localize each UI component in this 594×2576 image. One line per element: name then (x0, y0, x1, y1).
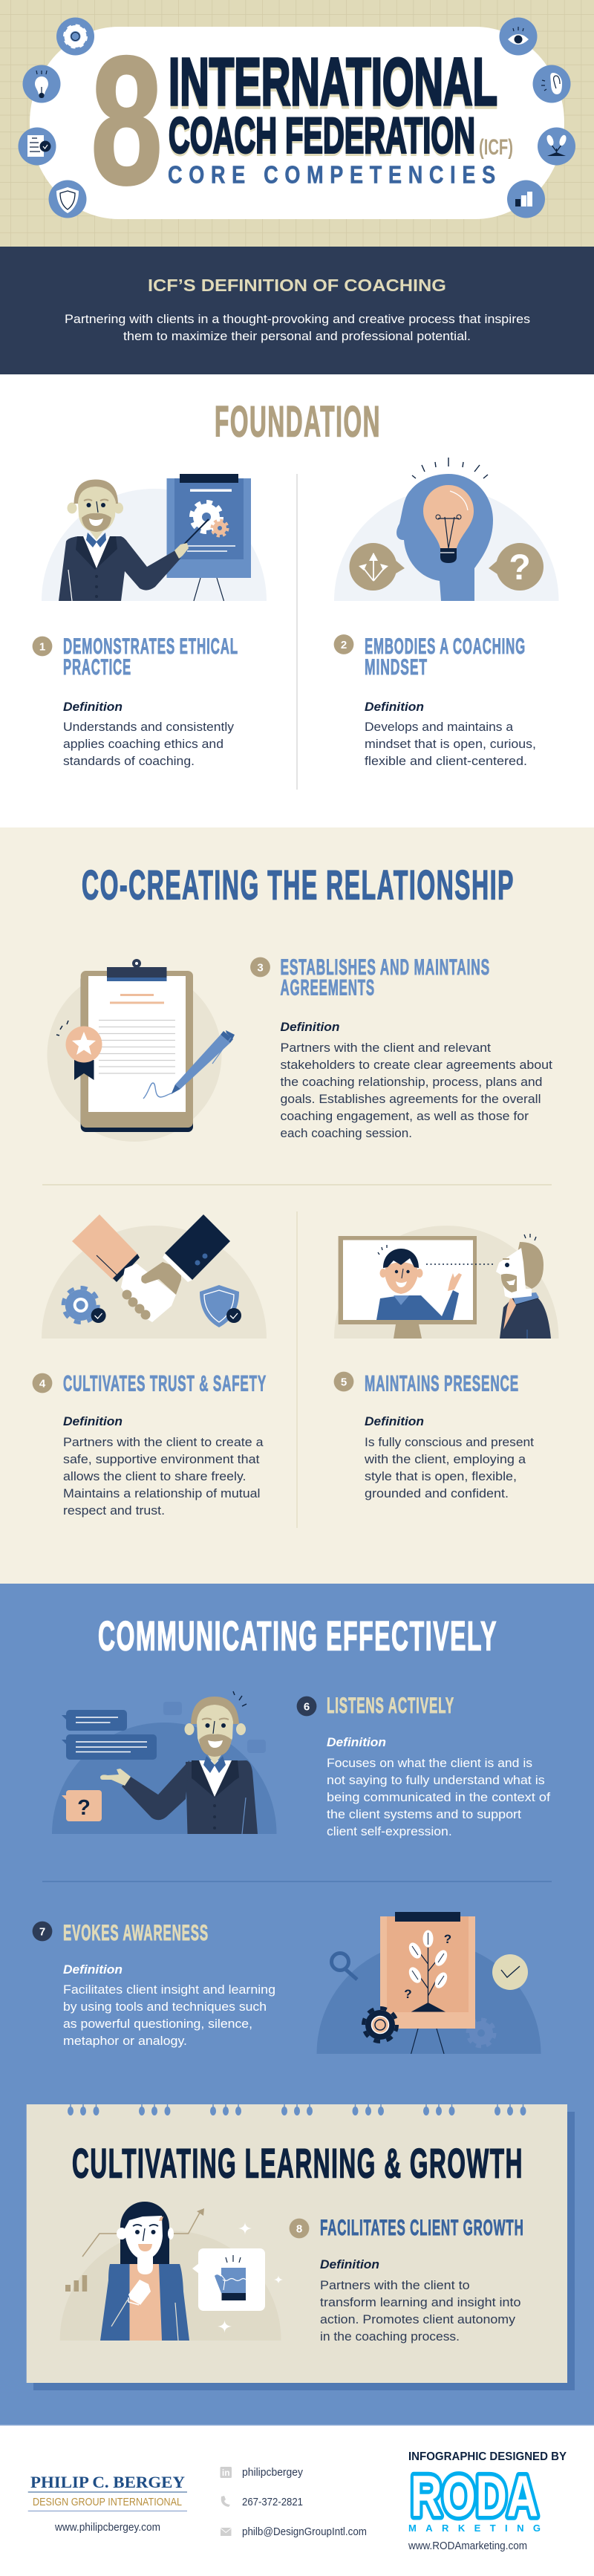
definition text 1: applies coaching ethics and (63, 737, 223, 751)
definition text 6: the client systems and to support (327, 1807, 521, 1821)
header white badge shape (30, 27, 564, 219)
definition label 5: Definition (365, 1415, 424, 1428)
heading 4: CULTIVATES TRUST & SAFETY (63, 1371, 267, 1396)
illustration: presenter at flip chart (42, 474, 267, 601)
badge 5: 5 (341, 1376, 347, 1389)
illustration: listening man with speech bubbles: ? (77, 1796, 91, 1820)
logo: RODA marketing: RODA (411, 2463, 538, 2528)
contact details (220, 2466, 367, 2538)
illustration: head with light bulb (334, 458, 558, 601)
illustration: listening man with speech bubbles (52, 1691, 276, 1834)
definition text 3: Partners with the client and relevant (281, 1041, 491, 1055)
icon: ear (533, 65, 570, 103)
illustration: woman with fist bump (60, 2202, 283, 2341)
definition text 7: as powerful questioning, silence, (63, 2017, 252, 2031)
competency 8 (290, 2216, 524, 2344)
definition text 4: respect and trust. (63, 1503, 165, 1518)
title suffix: ICF: (ICF) (479, 135, 513, 160)
icon: shield (49, 180, 86, 218)
logo: Philip C. Bergey: DESIGN GROUP INTERNATIONAL (33, 2496, 182, 2508)
definition text 3: each coaching session. (281, 1126, 412, 1140)
panel: ICF definition of coaching (0, 247, 594, 374)
badge 1 (33, 637, 52, 656)
badge 1: 1 (39, 640, 45, 654)
definition text 4: safe, supportive environment that (63, 1452, 260, 1466)
badge 4 (33, 1373, 52, 1393)
icon: bar chart (507, 180, 545, 218)
icon: document with check (18, 128, 56, 165)
footer (0, 2424, 594, 2576)
heading 1: PRACTICE (63, 655, 131, 680)
definition text 1: standards of coaching. (63, 754, 195, 768)
definition text 2: Develops and maintains a (365, 720, 514, 734)
panel: co-creating the relationship (0, 827, 594, 1584)
designer credit: INFOGRAPHIC DESIGNED BY (408, 2450, 567, 2463)
competency 5 (334, 1371, 534, 1500)
definition text 4: allows the client to share freely. (63, 1469, 247, 1483)
definition text 3: the coaching relationship, process, plans and (281, 1075, 542, 1089)
panel: communicating effectively (0, 1584, 594, 2425)
definition text 7: Facilitates client insight and learning (63, 1983, 275, 1997)
definition text 6: client self-expression. (327, 1824, 452, 1838)
icon: light bulb (22, 65, 61, 103)
definition heading: ICF’S DEFINITION OF COACHING (148, 276, 446, 295)
definition text 5: style that is open, flexible, (365, 1469, 517, 1483)
competency 4 (33, 1371, 267, 1518)
competency 6 (297, 1694, 550, 1838)
email: philb@DesignGroupIntl.com (242, 2525, 367, 2538)
icon: mail (221, 2528, 232, 2536)
badge 5 (334, 1372, 353, 1391)
icon: phone (221, 2496, 230, 2507)
header panel (0, 0, 594, 247)
definition text 3: coaching engagement, as well as those for (281, 1109, 529, 1123)
icon: eye (499, 18, 538, 55)
logo: Philip C. Bergey (28, 2473, 187, 2534)
illustration: plant on flip chart: ? (404, 1987, 412, 2001)
definition text 4: Maintains a relationship of mutual (63, 1486, 260, 1500)
definition label 4: Definition (63, 1415, 123, 1428)
icon: growing plant (538, 128, 575, 165)
heading: foundation: FOUNDATION (215, 398, 381, 446)
competency 7 (33, 1921, 275, 2048)
definition label 3: Definition (281, 1021, 340, 1034)
definition text 1: Understands and consistently (63, 720, 235, 734)
definition text 7: metaphor or analogy. (63, 2034, 187, 2048)
definition text 8: Partners with the client to (320, 2278, 470, 2292)
logo: RODA marketing: MARKETING (408, 2523, 541, 2534)
title (91, 19, 513, 223)
definition text 4: Partners with the client to create a (63, 1435, 264, 1449)
illustration: clipboard and pen (48, 959, 235, 1142)
heading 3: AGREEMENTS (281, 976, 375, 1000)
definition text 5: Is fully conscious and present (365, 1435, 534, 1449)
icon: gear (56, 18, 94, 55)
badge 8: 8 (296, 2222, 302, 2236)
badge 7: 7 (39, 1925, 45, 1939)
definition text 2: mindset that is open, curious, (365, 737, 536, 751)
logo: Philip C. Bergey: www.philipcbergey.com (54, 2521, 160, 2534)
badge 2: 2 (341, 639, 347, 651)
definition text 5: grounded and confident. (365, 1486, 509, 1500)
heading 6: LISTENS ACTIVELY (327, 1694, 454, 1718)
heading 1: DEMONSTRATES ETHICAL (63, 634, 238, 659)
illustration: plant on flip chart (316, 1912, 541, 2054)
definition label 1: Definition (63, 700, 123, 714)
competency 1 (33, 634, 238, 768)
phone number: 267-372-2821 (242, 2496, 303, 2508)
title line: core competencies: CORE COMPETENCIES (168, 162, 495, 189)
definition label 8: Definition (320, 2258, 379, 2271)
icon: LinkedIn: in (222, 2468, 230, 2478)
heading 2: MINDSET (365, 655, 428, 680)
numeral 8: 8 (91, 19, 163, 223)
definition text 5: with the client, employing a (364, 1452, 526, 1466)
competency 2 (334, 634, 536, 768)
LinkedIn handle: philipcbergey (242, 2466, 303, 2479)
definition text 8: in the coaching process. (320, 2329, 460, 2344)
illustration: plant on flip chart: ? (444, 1932, 451, 1946)
definition text 2: flexible and client-centered. (365, 754, 527, 768)
icon: LinkedIn (220, 2467, 232, 2478)
illustration: head with light bulb: ? (509, 548, 531, 588)
badge 8 (290, 2219, 309, 2238)
definition text: Partnering with clients in a thought-provoking and creative process that inspires (65, 312, 530, 326)
definition text 6: Focuses on what the client is and is (327, 1756, 532, 1770)
competency 3 (250, 955, 552, 1140)
illustration: video call (334, 1226, 558, 1339)
designer credit: www.RODAmarketing.com (408, 2540, 527, 2552)
definition text: them to maximize their personal and professional potential. (123, 329, 471, 343)
notepad spiral rings (68, 2104, 526, 2115)
badge 7 (33, 1922, 52, 1941)
logo: Philip C. Bergey: PHILIP C. BERGEY (30, 2473, 185, 2491)
panel: foundation (0, 374, 594, 827)
definition label 7: Definition (63, 1963, 123, 1977)
badge 4: 4 (39, 1377, 46, 1391)
badge 3 (250, 957, 270, 977)
designer credit (408, 2450, 567, 2552)
definition text 3: goals. Establishes agreements for the overall (281, 1092, 541, 1106)
definition text 6: being communicated in the context of (327, 1790, 550, 1804)
definition text 3: stakeholders to create clear agreements about (281, 1058, 552, 1072)
definition label 6: Definition (327, 1736, 386, 1749)
definition text 7: by using tools and techniques such (63, 2000, 267, 2014)
badge 6 (297, 1697, 316, 1716)
heading 7: EVOKES AWARENESS (63, 1921, 209, 1945)
badge 3: 3 (257, 961, 264, 975)
definition text (65, 312, 530, 343)
illustration: handshake (42, 1214, 267, 1339)
definition text 8: transform learning and insight into (320, 2295, 521, 2309)
badge 6: 6 (304, 1701, 310, 1713)
definition text 8: action. Promotes client autonomy (320, 2312, 516, 2326)
definition label 2: Definition (365, 700, 424, 714)
definition text 6: not saying to fully understand what is (327, 1773, 545, 1787)
badge 2 (334, 634, 353, 654)
panel: cultivating learning and growth (27, 2104, 575, 2390)
